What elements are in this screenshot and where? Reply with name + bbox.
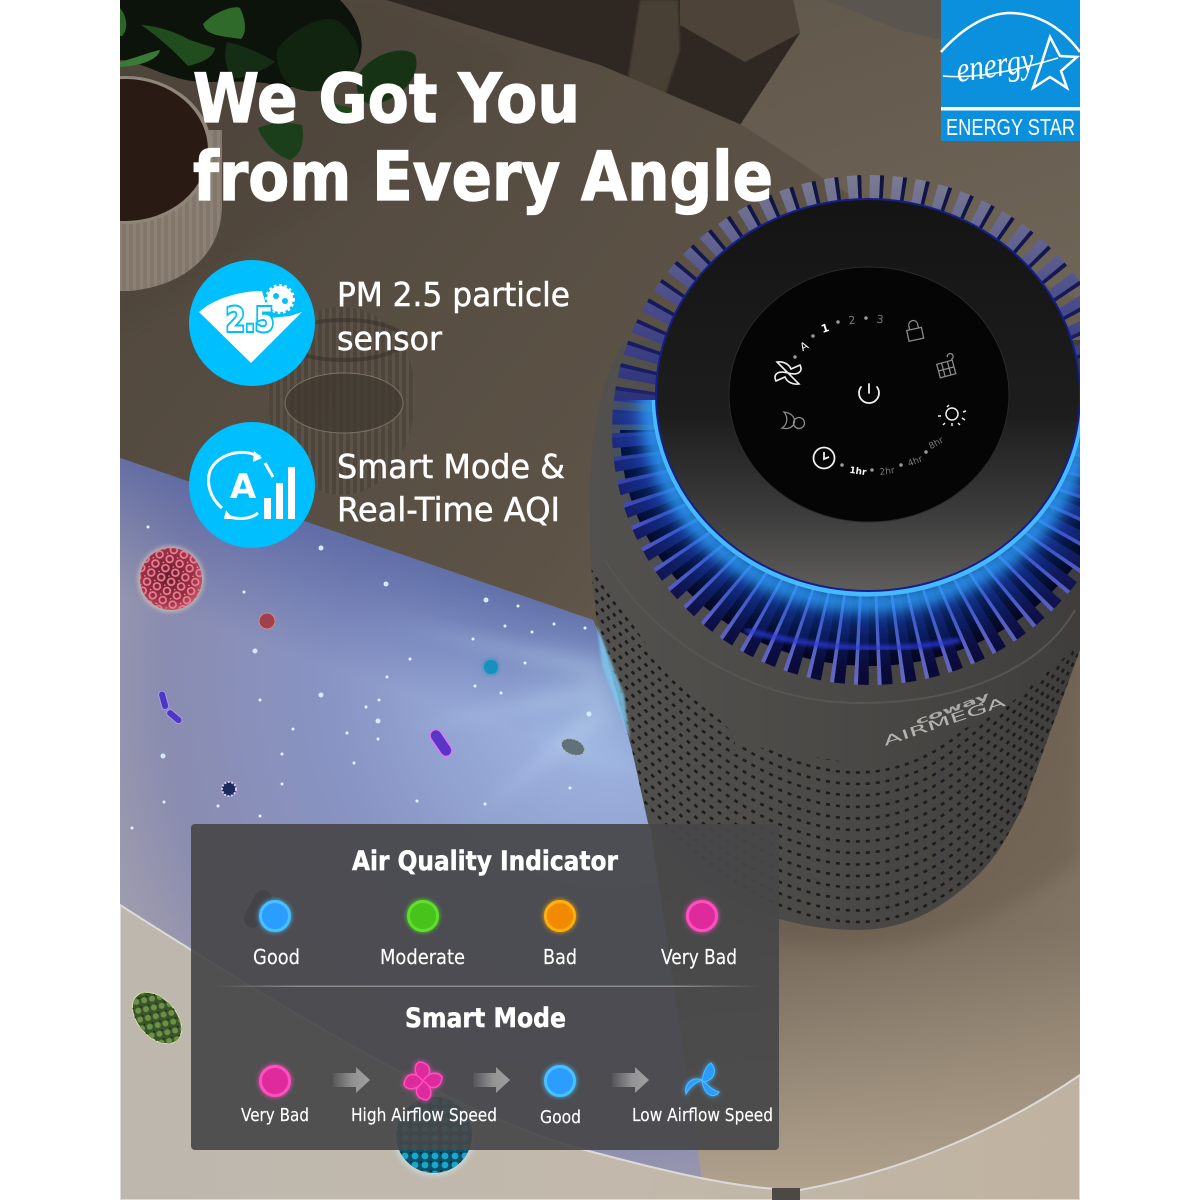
step: good: Good — [540, 1107, 581, 1128]
feature text: PM 2.5 particle — [337, 275, 570, 314]
arrow — [473, 1067, 510, 1093]
air purifier — [590, 195, 1120, 930]
step: good — [540, 1066, 581, 1128]
indicator: moderate — [380, 902, 465, 969]
title — [193, 60, 773, 217]
plant pot — [120, 76, 222, 291]
microbe: dark virus — [222, 782, 236, 796]
light beam — [120, 458, 705, 1200]
fan speed scale: 2 — [848, 314, 856, 327]
icon: lock — [905, 319, 924, 341]
indicator: bad: Bad — [543, 945, 577, 969]
indicator: bad — [543, 902, 577, 969]
brand logo — [885, 693, 1006, 746]
feature: PM 2.5 sensor — [189, 260, 570, 386]
energy star badge — [941, 0, 1080, 141]
floating particles — [163, 548, 589, 756]
energy star badge: ENERGY STAR — [946, 114, 1075, 140]
step: low airflow speed — [632, 1063, 773, 1126]
timer scale: 1hr — [849, 466, 868, 478]
plant leaves — [120, 0, 417, 160]
indicator: very bad: Very Bad — [661, 945, 737, 969]
drinking glass — [284, 318, 413, 495]
feature text — [337, 447, 565, 529]
indicator: good: Good — [253, 945, 300, 969]
feature text: Real-Time AQI — [337, 490, 560, 529]
title: from Every Angle — [193, 138, 773, 217]
table leg — [772, 1188, 800, 1200]
indicator: good — [253, 902, 300, 969]
icon: light bulb — [938, 405, 966, 426]
title: We Got You — [193, 60, 580, 139]
feature: Smart Mode and AQI — [189, 422, 565, 548]
light edge of collar — [715, 610, 1076, 704]
feature text: Smart Mode & — [337, 447, 565, 486]
step: high airflow speed: High Airflow Speed — [351, 1105, 497, 1126]
control panel — [729, 267, 1009, 522]
perforated grille — [592, 569, 1080, 924]
icon: PM 2.5 sensor — [189, 260, 315, 386]
feature text: sensor — [337, 319, 442, 358]
indicator: very bad — [661, 902, 737, 969]
fan speed scale: 1 — [820, 321, 831, 336]
step: very bad — [241, 1066, 309, 1126]
feature text — [337, 275, 570, 358]
step: very bad: Very Bad — [241, 1105, 309, 1126]
icon: fan — [775, 362, 801, 384]
shadow under purifier — [814, 679, 1076, 942]
purifier body — [590, 340, 1080, 930]
microbe: green spore — [123, 983, 191, 1053]
blue air intake ring — [620, 195, 1120, 666]
background: wooden floor and dark furniture — [386, 0, 1080, 298]
icon: filter grid — [935, 353, 958, 378]
icon: smart mode AQI: A — [230, 467, 257, 507]
arrow — [333, 1067, 370, 1093]
icon: smart mode AQI — [189, 422, 315, 548]
heading: smart mode: Smart Mode — [405, 1003, 566, 1034]
timer scale — [850, 438, 942, 475]
brand logo: coway — [914, 690, 992, 728]
infographic canvas — [120, 0, 1080, 1200]
icon: sleep moon — [782, 412, 804, 429]
small particles — [132, 527, 585, 828]
lighter lower table area — [698, 969, 1080, 1189]
panel: air quality and smart mode — [191, 824, 779, 1150]
microbe: twin rods — [158, 690, 183, 725]
timer scale: 4hr — [906, 454, 925, 469]
energy star badge: energy — [954, 39, 1036, 90]
step: low airflow speed: Low Airflow Speed — [632, 1105, 773, 1126]
microbe: teal spore — [484, 660, 498, 674]
indicator: moderate: Moderate — [380, 945, 465, 969]
brand logo: AIRMEGA — [882, 695, 1008, 750]
wood floor around table — [120, 905, 1080, 1200]
light rays — [462, 637, 606, 750]
fan speed scale: A — [798, 339, 811, 354]
shadow band on table — [120, 0, 520, 330]
arrow — [612, 1067, 649, 1093]
step: high airflow speed — [351, 1062, 497, 1126]
faint capsule behind panel — [244, 890, 272, 928]
bright intake edge of beam — [597, 625, 630, 740]
microbe: purple bacterium — [429, 728, 453, 758]
fan speed scale: 3 — [876, 313, 884, 326]
darker top of beam — [120, 458, 632, 754]
icon: PM 2.5 sensor: 2.5 — [226, 300, 274, 339]
top disc — [656, 199, 1080, 591]
timer scale: 2hr — [879, 466, 896, 478]
heading: air quality indicator: Air Quality Indicator — [352, 846, 619, 877]
power button — [859, 384, 879, 403]
fan speed scale — [795, 313, 926, 470]
microbe: teal virus below panel — [393, 1094, 475, 1176]
table top — [120, 0, 1080, 1200]
microbe: large pink virus — [138, 546, 204, 612]
microbe: grey spore — [559, 736, 587, 758]
microbe: small red virus — [259, 613, 275, 629]
icon: clock — [814, 448, 834, 468]
timer scale: 8hr — [927, 436, 946, 452]
